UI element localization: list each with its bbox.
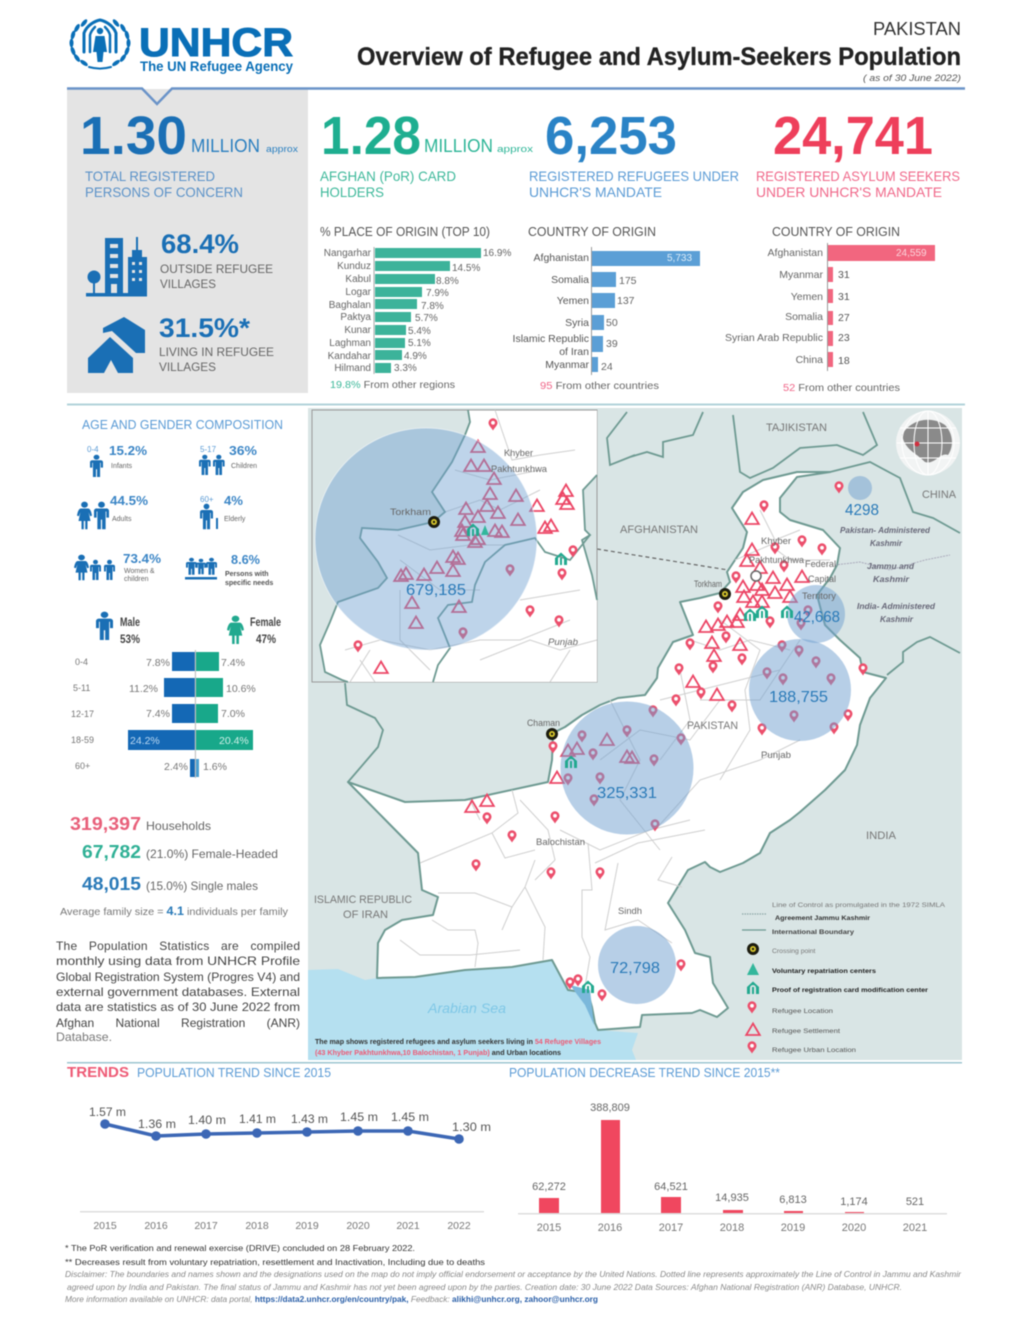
circle values: 72,798 xyxy=(610,960,660,977)
markers: refugee urban locations xyxy=(472,481,868,1002)
map labels: Capital xyxy=(808,574,836,585)
panel: registered refugees: COUNTRY OF ORIGIN xyxy=(528,225,656,239)
bar chart: place of origin: 5.1% xyxy=(408,338,431,349)
stat: outside villages: 68.4% xyxy=(161,229,239,259)
stat: specific needs xyxy=(185,552,273,587)
panel: age and gender composition xyxy=(71,417,283,778)
bar chart: asylum seekers by country: Afghanistan xyxy=(768,247,823,259)
legend: Refugee Location xyxy=(772,1008,833,1015)
bar chart: refugees by country: of Iran xyxy=(559,346,589,358)
legend: Refugee Urban Location xyxy=(772,1047,856,1054)
line chart: population trend: 2015 xyxy=(93,1220,117,1232)
bar chart: place of origin: Laghman xyxy=(329,338,371,349)
bar chart: refugees by country: Islamic Republic xyxy=(513,333,589,345)
legend: Agreement Jammu Kashmir xyxy=(775,915,870,922)
map labels: Punjab xyxy=(761,750,791,761)
line chart: population trend: 1.43 m xyxy=(291,1112,328,1126)
population pyramid: 1.6% xyxy=(203,761,227,773)
map note xyxy=(315,1037,601,1057)
population pyramid: 2.4% xyxy=(164,761,188,773)
panel: total persons of concern xyxy=(67,88,965,393)
inset value: 679,185 xyxy=(406,582,466,599)
text block: data note: The Population Statistics are compiled xyxy=(56,939,300,953)
bar chart: place of origin: Nangarhar xyxy=(324,248,372,259)
map labels: Khyber xyxy=(761,536,791,547)
male label: Male xyxy=(120,615,140,629)
stat: living in villages: 31.5%* xyxy=(159,313,251,343)
bar chart: population decrease: 1,174 xyxy=(840,1196,868,1208)
line chart: population trend: 1.36 m xyxy=(138,1117,176,1131)
household statistics: 67,782 xyxy=(82,842,141,862)
bar chart: place of origin: 4.9% xyxy=(404,351,427,362)
household statistics: (15.0%) Single males xyxy=(146,879,258,893)
circle values xyxy=(597,502,879,977)
text block: data note xyxy=(56,939,300,1044)
legend: Crossing point xyxy=(772,948,816,955)
bar chart: place of origin: 16.9% xyxy=(483,248,511,259)
panel: Afghan PoR card holders: AFGHAN (PoR) CARD xyxy=(320,168,456,184)
male label: 53% xyxy=(120,632,140,646)
population pyramid: 18-59 xyxy=(71,735,94,745)
footnotes xyxy=(65,1243,962,1304)
Pakistan territory xyxy=(348,472,886,1030)
map labels: Pakhtunkhwa xyxy=(749,555,805,566)
icon: tents xyxy=(88,317,145,373)
population pyramid: 12-17 xyxy=(71,709,94,719)
line of control xyxy=(835,555,950,570)
panel: asylum seekers: REGISTERED ASYLUM SEEKERS xyxy=(756,168,960,184)
map labels: Territory xyxy=(802,591,836,602)
legend xyxy=(742,902,946,1054)
bar chart: asylum seekers by country: Yemen xyxy=(791,291,823,303)
bar chart: place of origin: 14.5% xyxy=(452,263,480,274)
bar chart: refugees by country: Myanmar xyxy=(545,359,589,371)
inset map: Khyber Pakhtunkhwa xyxy=(312,410,597,682)
population pyramid: 10.6% xyxy=(226,683,256,695)
population pyramid: 7.0% xyxy=(221,708,245,720)
panel: registered refugees: UNHCR'S MANDATE xyxy=(529,184,662,200)
inset labels: Khyber xyxy=(504,448,533,459)
bar chart: population decrease: 2015 xyxy=(537,1222,561,1234)
bar chart: population decrease xyxy=(518,1102,947,1234)
population pyramid: 0-4 xyxy=(75,657,88,667)
population pyramid: 7.4% xyxy=(146,708,170,720)
map labels: PAKISTAN xyxy=(687,720,738,732)
stat: specific needs: specific needs xyxy=(225,580,273,587)
stat: women and children: children xyxy=(124,576,149,583)
stat: specific needs: 8.6% xyxy=(231,552,260,567)
stat: elderly: Elderly xyxy=(224,516,246,523)
line chart: population trend: 1.45 m xyxy=(340,1110,378,1124)
map labels: Pakistan- Administered xyxy=(840,525,931,535)
map labels: Torkham xyxy=(694,579,722,590)
trends heading: TRENDS xyxy=(67,1064,129,1081)
text block: data note: monthly using data from UNHCR Profile xyxy=(56,954,300,968)
circle values: 188,755 xyxy=(769,689,828,706)
bar chart: asylum seekers by country: Syrian Arab Republic xyxy=(725,332,823,344)
stat: elderly: 4% xyxy=(224,493,243,508)
map labels: Arabian Sea xyxy=(427,1000,506,1016)
logo: UNHCR: UNHCR xyxy=(139,21,293,65)
stat: women and children xyxy=(74,551,161,583)
circle values: 325,331 xyxy=(597,785,657,802)
panel: Afghan PoR card holders: % PLACE OF ORIGIN (TOP 10) xyxy=(320,225,490,239)
circle values: 42,668 xyxy=(794,609,840,626)
panel: registered refugees: 6,253 xyxy=(545,106,677,166)
map note: The map shows registered refugees and asylum seekers living in 54 Refugee Villages xyxy=(315,1037,601,1046)
legend: Refugee Settlement xyxy=(772,1028,840,1035)
bar chart: place of origin: Baghalan xyxy=(329,300,371,311)
icon: buildings xyxy=(86,237,147,296)
bar chart: asylum seekers by country: China xyxy=(796,354,823,366)
household statistics: 319,397 xyxy=(70,814,141,834)
text block: data note: data are statistics as of 30 June 2022 from xyxy=(56,1000,300,1014)
line chart: population trend: 1.57 m xyxy=(89,1105,126,1119)
bar chart: place of origin: Kunduz xyxy=(337,261,371,272)
globe xyxy=(896,411,960,475)
heading: decrease trend: POPULATION DECREASE TREND SINCE 2015** xyxy=(509,1065,780,1080)
panel: registered refugees: REGISTERED REFUGEES UNDER xyxy=(529,168,739,184)
bar chart: place of origin: 5.4% xyxy=(408,326,431,337)
text block: data note: Database. xyxy=(56,1030,112,1044)
panel: total persons of concern: PERSONS OF CONCERN xyxy=(85,184,243,200)
footnotes: ** Decreases result from voluntary repatriation, resettlement and Inactivation, Including due to deaths xyxy=(65,1257,485,1267)
stat: adults xyxy=(77,493,148,529)
stat: elderly: 60+ xyxy=(200,495,214,504)
map labels: Kashmir xyxy=(870,538,903,548)
inset labels xyxy=(390,448,578,648)
trends heading: POPULATION TREND SINCE 2015 xyxy=(137,1065,331,1080)
markers: refugee settlements xyxy=(465,512,809,812)
female label: 47% xyxy=(256,632,276,646)
stat: children xyxy=(199,443,257,475)
bar chart: place of origin: Kabul xyxy=(345,274,371,285)
map labels: Kashmir xyxy=(873,574,910,584)
footnotes: agreed upon by India and Pakistan. The final status of Jammu and Kashmir has not yet been agreed upon by the parties. Creation date: 30 June 2022 Data Sources: Afghan National Registration (ANR) Database, UNHCR. xyxy=(67,1282,902,1292)
bar chart: asylum seekers by country: 52 From other countries xyxy=(783,383,900,394)
inset crossing and centers xyxy=(428,516,567,565)
total figure: 1.30 xyxy=(80,106,187,166)
text block: data note: external government databases. External xyxy=(56,985,300,999)
heading: AGE AND GENDER COMPOSITION xyxy=(82,417,283,432)
map labels: Balochistan xyxy=(536,837,585,848)
female label: Female xyxy=(250,615,281,629)
stat: infants: 15.2% xyxy=(109,443,147,458)
population pyramid: 5-11 xyxy=(73,683,90,693)
logo: UNHCR: The UN Refugee Agency xyxy=(140,58,293,74)
legend: Proof of registration card modification center xyxy=(772,987,928,994)
line chart: population trend: 2020 xyxy=(346,1220,370,1232)
legend: Voluntary repatriation centers xyxy=(772,968,876,975)
panel: total persons of concern: MILLION xyxy=(191,135,260,156)
footnotes: More information available on UNHCR: data portal, https://data2.unhcr.org/en/country/pak, Feedback: alikhi@unhcr.org, zahoor@unhcr.org xyxy=(65,1294,598,1304)
bar chart: asylum seekers by country: 24,559 xyxy=(896,248,927,259)
panel: total persons of concern: VILLAGES xyxy=(159,360,216,374)
map note: (43 Khyber Pakhtunkhwa,10 Balochistan, 1 Punjab) and Urban locations xyxy=(315,1048,561,1057)
bar chart: population decrease: 2019 xyxy=(781,1222,805,1234)
map labels: Chaman xyxy=(527,718,560,729)
panel: Afghan PoR card holders: 1.28 xyxy=(321,106,421,166)
inset labels: Punjab xyxy=(548,637,578,648)
bar chart: asylum seekers by country: 18 xyxy=(838,355,850,367)
map labels: TAJIKISTAN xyxy=(766,422,827,434)
text block: data note: Afghan National Registration (ANR) xyxy=(56,1016,300,1030)
bar chart: population decrease: 2018 xyxy=(720,1222,744,1234)
bar chart: refugees by country: 50 xyxy=(606,317,618,329)
bar chart: population decrease: 2016 xyxy=(598,1222,622,1234)
bar chart: place of origin: 7.8% xyxy=(421,301,444,312)
bar chart: population decrease: 14,935 xyxy=(715,1192,749,1204)
footnotes: * The PoR verification and renewal exercise (DRIVE) concluded on 28 February 2022. xyxy=(65,1243,415,1253)
legend: Line of Control as promulgated in the 1972 SIMLA xyxy=(772,902,946,909)
household statistics: 48,015 xyxy=(82,874,141,894)
panel: total persons of concern: approx xyxy=(266,144,299,154)
female label xyxy=(227,615,281,646)
stat: adults: Adults xyxy=(112,516,132,523)
inset urban locations xyxy=(354,418,578,652)
bar chart: place of origin: Paktya xyxy=(340,312,371,323)
bar chart: refugees by country: 137 xyxy=(617,295,635,307)
map labels: Jammu and xyxy=(867,561,915,571)
panel: total persons of concern: LIVING IN REFUGEE xyxy=(159,345,274,359)
bar chart: refugees by country: 39 xyxy=(606,338,618,350)
bar chart: asylum seekers by country: 27 xyxy=(838,312,850,324)
bar chart: asylum seekers by country: 23 xyxy=(838,332,850,344)
map labels: Kashmir xyxy=(880,614,914,624)
line chart: population trend: 2021 xyxy=(396,1220,420,1232)
panel: Afghan PoR card holders: MILLION xyxy=(424,135,493,156)
panel: asylum seekers: 24,741 xyxy=(773,106,933,166)
panel: registered refugees xyxy=(513,106,739,392)
footnotes: Disclaimer: The boundaries and names shown and the designations used on the map do not imply official endorsement or acceptance by the United Nations. Dotted line represents approximately the Line of Control in Jammu and Kashmir xyxy=(65,1269,962,1279)
bar chart: asylum seekers by country: Somalia xyxy=(785,311,823,323)
population pyramid xyxy=(71,650,256,778)
bar chart: place of origin: 3.3% xyxy=(394,363,417,374)
line chart: population trend: 2018 xyxy=(245,1220,269,1232)
circle values: 4298 xyxy=(845,502,879,519)
bar chart: refugees by country: 175 xyxy=(619,275,637,287)
total label: TOTAL REGISTERED xyxy=(85,168,215,184)
bar chart: population decrease: 388,809 xyxy=(590,1102,630,1114)
logo: UNHCR xyxy=(70,18,293,74)
panel: Afghan PoR card holders: approx xyxy=(497,144,534,154)
bar chart: refugees by country xyxy=(513,247,700,392)
line chart: population trend: 2019 xyxy=(295,1220,319,1232)
map labels: ISLAMIC REPUBLIC xyxy=(314,894,412,906)
bar chart: refugees by country: 24 xyxy=(601,361,613,373)
map labels: OF IRAN xyxy=(343,909,388,921)
stat: women and children: Women & xyxy=(124,568,155,575)
bar chart: population decrease: 2020 xyxy=(842,1222,866,1234)
bar chart: refugees by country: Afghanistan xyxy=(534,252,589,264)
line chart: population trend: 1.40 m xyxy=(188,1113,226,1127)
bar chart: place of origin: Logar xyxy=(345,287,372,298)
line chart: population trend: 2022 xyxy=(447,1220,471,1232)
male label xyxy=(96,612,140,646)
bar chart: refugees by country: Yemen xyxy=(557,295,589,307)
international boundaries xyxy=(345,412,960,782)
panel: asylum seekers: UNDER UNHCR'S MANDATE xyxy=(756,184,942,200)
line chart: population trend: 1.45 m xyxy=(391,1110,429,1124)
panel: asylum seekers xyxy=(725,106,960,394)
inset labels: Pakhtunkhwa xyxy=(491,464,548,475)
panel: total persons of concern: OUTSIDE REFUGEE xyxy=(160,262,273,276)
inset settlements xyxy=(374,440,574,673)
bar chart: place of origin: 19.8% From other regions xyxy=(330,380,455,391)
map labels: CHINA xyxy=(922,489,957,501)
line chart: population trend: 1.30 m xyxy=(452,1120,491,1134)
population circles xyxy=(560,476,872,1004)
country name: PAKISTAN xyxy=(873,19,961,39)
stat: elderly xyxy=(200,493,246,529)
inset population circle xyxy=(315,428,537,650)
map labels xyxy=(314,422,957,1016)
map labels: Sindh xyxy=(618,906,642,917)
bar chart: place of origin: 5.7% xyxy=(415,313,438,324)
population pyramid: 20.4% xyxy=(219,735,249,747)
inset labels: Torkham xyxy=(390,507,431,518)
markers: crossing points and centers xyxy=(546,588,793,993)
text block: data note: Global Registration System (Progres V4) and xyxy=(56,970,300,984)
bar chart: refugees by country: 95 From other countries xyxy=(540,381,659,392)
map labels: India- Administered xyxy=(857,601,936,611)
bar chart: place of origin xyxy=(324,247,511,391)
bar chart: population decrease: 521 xyxy=(906,1196,924,1208)
bar chart: refugees by country: Somalia xyxy=(551,274,589,286)
household statistics: Average family size = 4.1 individuals per family xyxy=(60,906,288,918)
panel: asylum seekers: COUNTRY OF ORIGIN xyxy=(772,225,900,239)
bar chart: place of origin: Kandahar xyxy=(328,351,372,362)
bar chart: refugees by country: 5,733 xyxy=(667,253,692,264)
panel: total persons of concern: VILLAGES xyxy=(160,277,216,291)
line chart: population trend: 2016 xyxy=(144,1220,168,1232)
bar chart: place of origin: 7.9% xyxy=(426,288,449,299)
bar chart: population decrease: 2021 xyxy=(903,1222,927,1234)
household statistics: Households xyxy=(146,819,211,833)
bar chart: place of origin: Hilmand xyxy=(334,363,371,374)
map of Pakistan xyxy=(308,408,962,1060)
bar chart: population decrease: 2017 xyxy=(659,1222,683,1234)
line chart: population trend: 2017 xyxy=(194,1220,218,1232)
date: ( as of 30 June 2022) xyxy=(863,73,961,84)
stat: children: 5-17 xyxy=(200,445,217,454)
map labels: INDIA xyxy=(866,830,897,842)
map labels: AFGHANISTAN xyxy=(620,524,698,536)
bar chart: asylum seekers by country: 31 xyxy=(838,269,850,281)
population pyramid: 60+ xyxy=(75,761,90,771)
line chart: population trend: 1.41 m xyxy=(239,1112,276,1126)
stat: women and children: 73.4% xyxy=(123,551,161,566)
stat: infants xyxy=(87,443,147,477)
sea xyxy=(308,960,638,1060)
district boundaries xyxy=(400,510,830,987)
bar chart: population decrease: 62,272 xyxy=(532,1181,566,1193)
stat: infants: 0-4 xyxy=(87,445,99,454)
bar chart: place of origin: 8.8% xyxy=(436,276,459,287)
stat: children: Children xyxy=(231,463,257,470)
population pyramid: 7.4% xyxy=(221,657,245,669)
household statistics xyxy=(60,814,288,918)
title: Overview of Refugee and Asylum-Seekers Population xyxy=(357,43,961,71)
bar chart: population decrease: 64,521 xyxy=(654,1181,688,1193)
line chart: population trend xyxy=(80,1105,491,1232)
bar chart: asylum seekers by country: 31 xyxy=(838,291,850,303)
bar chart: population decrease: 6,813 xyxy=(779,1194,807,1206)
bar chart: place of origin: Kunar xyxy=(344,325,372,336)
stat: adults: 44.5% xyxy=(110,493,148,508)
bar chart: refugees by country: Syria xyxy=(565,317,589,329)
panel: Afghan PoR card holders: HOLDERS xyxy=(320,184,384,200)
legend: International Boundary xyxy=(772,929,854,936)
bar chart: asylum seekers by country xyxy=(725,243,935,394)
population pyramid: 24.2% xyxy=(130,735,160,747)
population pyramid: 11.2% xyxy=(129,683,158,695)
trends heading xyxy=(67,1064,331,1081)
household statistics: (21.0%) Female-Headed xyxy=(146,847,278,861)
map labels: Federal xyxy=(805,559,836,570)
stat: children: 36% xyxy=(229,443,257,458)
header xyxy=(70,18,961,84)
panel: Afghan PoR card holders xyxy=(320,106,534,391)
population pyramid: 7.8% xyxy=(146,657,170,669)
stat: specific needs: Persons with xyxy=(225,571,269,578)
stat: infants: Infants xyxy=(111,463,133,470)
bar chart: asylum seekers by country: Myanmar xyxy=(779,269,823,281)
